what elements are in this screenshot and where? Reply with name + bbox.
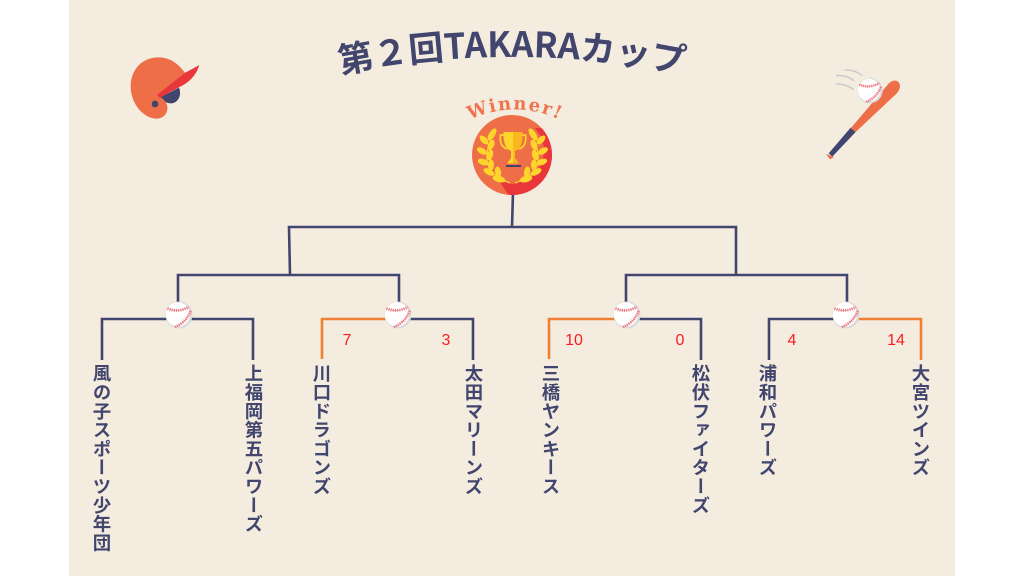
team 8: 大宮ツインズ [910, 364, 931, 477]
title [337, 31, 688, 76]
icon: right laurel [515, 127, 549, 184]
winner label [465, 98, 562, 118]
team 3: 川口ドラゴンズ [311, 364, 332, 496]
score 0: 0 [676, 332, 684, 349]
icon: batting helmet [131, 57, 199, 119]
scores [343, 332, 905, 349]
bracket lines [102, 192, 847, 360]
title: 第２回TAKARAカップ [337, 31, 688, 76]
score 4: 4 [788, 332, 796, 349]
icon: bat and ball [826, 70, 900, 159]
team 4: 太田マリーンズ [463, 364, 484, 496]
icon: trophy [500, 132, 526, 167]
score 3: 3 [442, 332, 450, 349]
team 6: 松伏ファイターズ [690, 364, 711, 514]
baseball nodes [166, 302, 860, 328]
winner label: Winner! [465, 98, 562, 118]
score 10: 10 [565, 332, 583, 349]
winning paths [322, 319, 921, 360]
team 5: 三橋ヤンキース [540, 364, 561, 496]
icon: left laurel [476, 127, 510, 184]
team 1: 風の子スポーツ少年団 [91, 364, 112, 552]
team names [91, 364, 931, 552]
icon: baseball 1 [166, 302, 192, 328]
team 2: 上福岡第五パワーズ [243, 364, 264, 533]
icon: baseball 2 [384, 302, 412, 328]
icon: baseball 3 [614, 302, 640, 328]
icon: baseball 4 [832, 302, 860, 328]
score 7: 7 [343, 332, 351, 349]
team 7: 浦和パワーズ [757, 364, 778, 477]
trophy medal [472, 115, 552, 195]
score 14: 14 [887, 332, 905, 349]
tournament graphics [100, 31, 922, 360]
